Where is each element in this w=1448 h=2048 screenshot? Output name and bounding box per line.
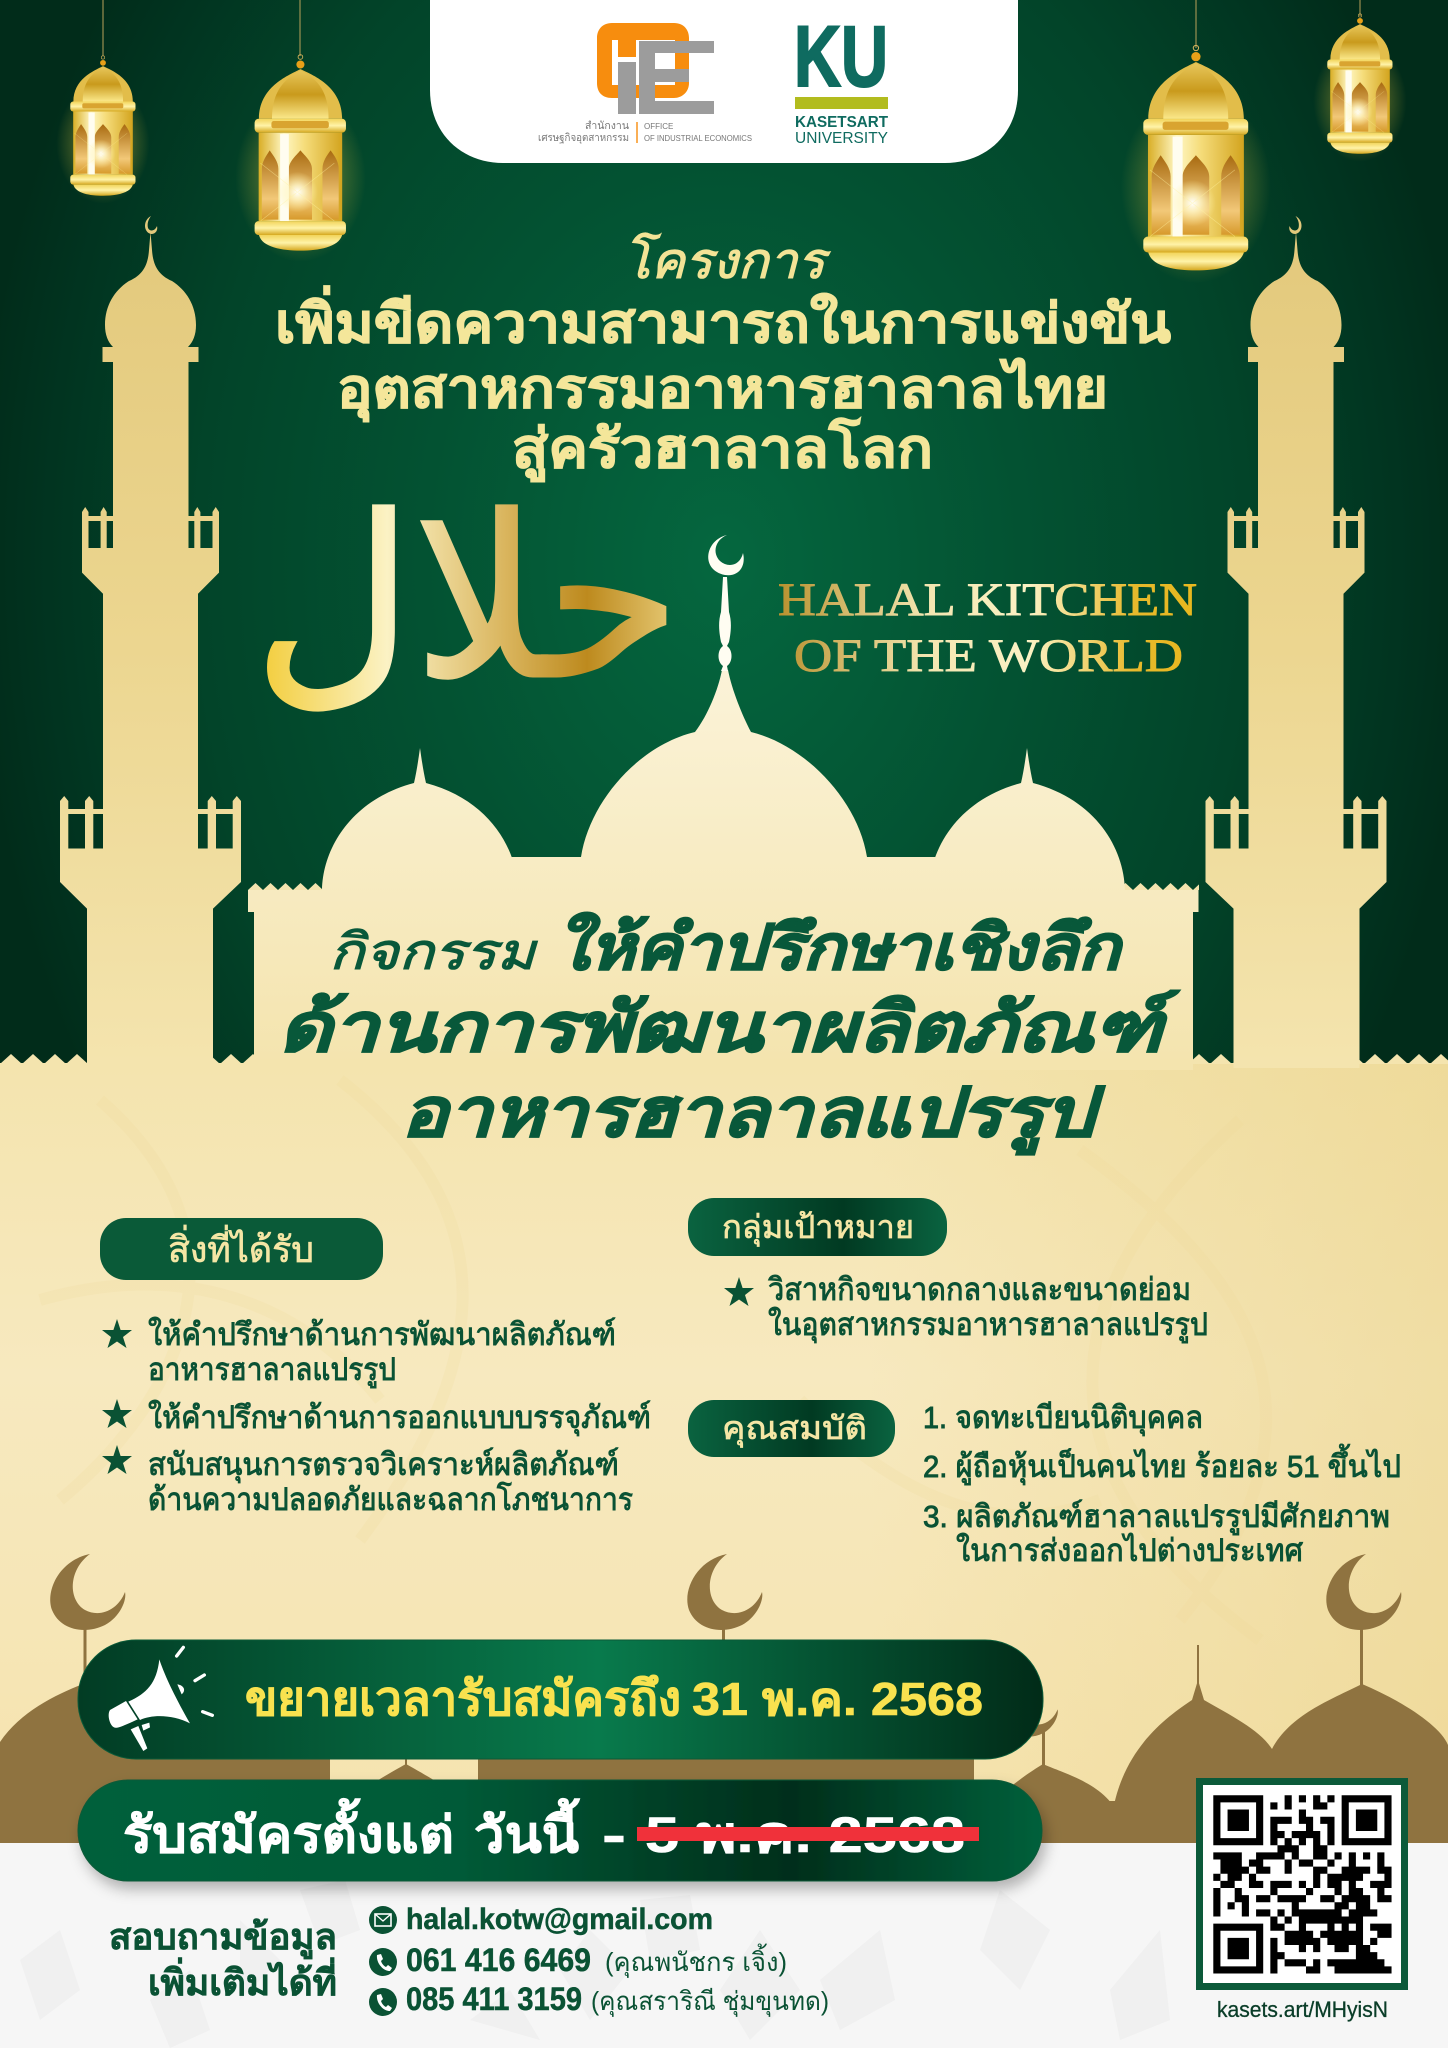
phone row 2 (369, 1981, 829, 2017)
logo: Office of Industrial Economics: เศรษฐกิจอุตสาหกรรม (538, 132, 629, 144)
phone row 2: (คุณสราริณี ชุ่มขุนทด) (591, 1986, 829, 2017)
QR caption: kasets.art/MHyisN (1217, 1997, 1388, 2022)
left minaret (60, 216, 241, 1068)
project title: อุตสาหกรรมอาหารฮาลาลไทย (337, 357, 1108, 423)
halal kitchen wordmark: HALAL KITCHEN (778, 574, 1197, 626)
benefit item 1 (102, 1317, 616, 1388)
benefit item 1: ให้คำปรึกษาด้านการพัฒนาผลิตภัณฑ์ (148, 1317, 616, 1352)
contact heading: เพิ่มเติมได้ที่ (148, 1957, 337, 2003)
activity headline: อาหารฮาลาลแปรรูป (401, 1075, 1105, 1155)
phone row 1 (369, 1942, 787, 1978)
original application dates banner: 5 พ.ค. 2568 (645, 1807, 965, 1863)
logo: Kasetsart University: KASETSART (795, 114, 889, 131)
panel: qualifications (688, 1400, 1401, 1568)
project title (275, 232, 1171, 482)
activity headline: กิจกรรม (329, 924, 539, 980)
target group text: ในอุตสาหกรรมอาหารฮาลาลแปรรูป (768, 1307, 1208, 1344)
original application dates banner: วันนี้ (474, 1798, 580, 1863)
extended deadline text: 31 พ.ค. 2568 (692, 1673, 983, 1725)
project title: เพิ่มขีดความสามารถในการแข่งขัน (275, 285, 1171, 354)
original application dates banner (78, 1780, 1042, 1881)
project title: โครงการ (623, 232, 830, 289)
contact heading: สอบถามข้อมูล (109, 1916, 337, 1960)
project title: สู่ครัวฮาลาลโลก (512, 417, 933, 482)
extended deadline text: ขยายเวลารับสมัครถึง (245, 1673, 681, 1726)
logo: Office of Industrial Economics: OF INDUSTRIAL ECONOMICS (644, 134, 752, 143)
target group heading pill (688, 1198, 947, 1256)
benefit item 1: อาหารฮาลาลแปรรูป (148, 1352, 396, 1388)
lantern left (235, 0, 366, 262)
qualifications heading pill (688, 1400, 895, 1457)
phone row 2: 085 411 3159 (406, 1981, 582, 2017)
contact heading (109, 1916, 337, 2003)
email row: halal.kotw@gmail.com (406, 1903, 713, 1936)
benefit item 3 (102, 1445, 633, 1517)
brown mosque skyline (0, 1554, 1448, 1843)
original application dates banner: - (602, 1807, 626, 1863)
target group heading pill: กลุ่มเป้าหมาย (722, 1209, 914, 1247)
benefit item 3: ด้านความปลอดภัยและฉลากโภชนาการ (148, 1482, 633, 1517)
benefit item 2: ให้คำปรึกษาด้านการออกแบบบรรจุภัณฑ์ (148, 1400, 651, 1437)
icon: megaphone (109, 1647, 212, 1751)
logo: Office of Industrial Economics (538, 23, 752, 144)
green background (0, 0, 1448, 1070)
phone row 1: 061 416 6469 (406, 1942, 591, 1978)
red strikethrough (637, 1827, 979, 1841)
lantern right (1121, 0, 1271, 283)
logo: Kasetsart University: UNIVERSITY (795, 130, 888, 147)
benefits heading pill: สิ่งที่ได้รับ (168, 1225, 314, 1270)
white logo header (430, 0, 1018, 163)
logo: Office of Industrial Economics: สำนักงาน (585, 120, 629, 132)
qualification list: ในการส่งออกไปต่างประเทศ (956, 1533, 1303, 1568)
phone row 1: (คุณพนัชกร เจิ้ง) (605, 1943, 787, 1978)
benefits heading pill (100, 1218, 383, 1280)
extended deadline banner (78, 1640, 1043, 1759)
panel: target group (688, 1198, 1208, 1344)
benefit item 3: สนับสนุนการตรวจวิเคราะห์ผลิตภัณฑ์ (148, 1447, 619, 1484)
extended deadline text (245, 1673, 983, 1726)
logo: Kasetsart University (794, 9, 889, 147)
activity headline (278, 912, 1180, 1155)
original application dates banner: รับสมัครตั้งแต่ (123, 1798, 454, 1863)
target group text: วิสาหกิจขนาดกลางและขนาดย่อม (767, 1272, 1191, 1307)
contact details (369, 1903, 829, 2017)
lantern far right (1313, 0, 1407, 162)
target group text (724, 1272, 1208, 1344)
qualification list (923, 1400, 1401, 1568)
qualification list: 2. ผู้ถือหุ้นเป็นคนไทย ร้อยละ 51 ขึ้นไป (923, 1444, 1401, 1486)
halal kitchen wordmark: OF THE WORLD (794, 630, 1183, 682)
halal kitchen wordmark (778, 574, 1197, 682)
bottom white mosaic panel (0, 1843, 1448, 2048)
logo: Office of Industrial Economics: OFFICE (644, 122, 673, 131)
lantern far left (56, 0, 150, 204)
activity headline: ให้คำปรึกษาเชิงลึก (555, 912, 1124, 983)
right minaret (1206, 216, 1386, 1068)
logo: Kasetsart University: KU (794, 9, 888, 105)
central mosque silhouette (248, 535, 1199, 1070)
halal arabic calligraphy: حلال (253, 468, 681, 729)
qualification list: 1. จดทะเบียนนิติบุคคล (923, 1400, 1203, 1437)
qualification list: 3. ผลิตภัณฑ์ฮาลาลแปรรูปมีศักยภาพ (923, 1499, 1390, 1535)
QR code (1196, 1778, 1408, 1990)
panel: benefits (100, 1218, 651, 1517)
activity headline: ด้านการพัฒนาผลิตภัณฑ์ (278, 990, 1180, 1066)
qualifications heading pill: คุณสมบัติ (722, 1410, 867, 1448)
cream lower panel (0, 1054, 1448, 1848)
